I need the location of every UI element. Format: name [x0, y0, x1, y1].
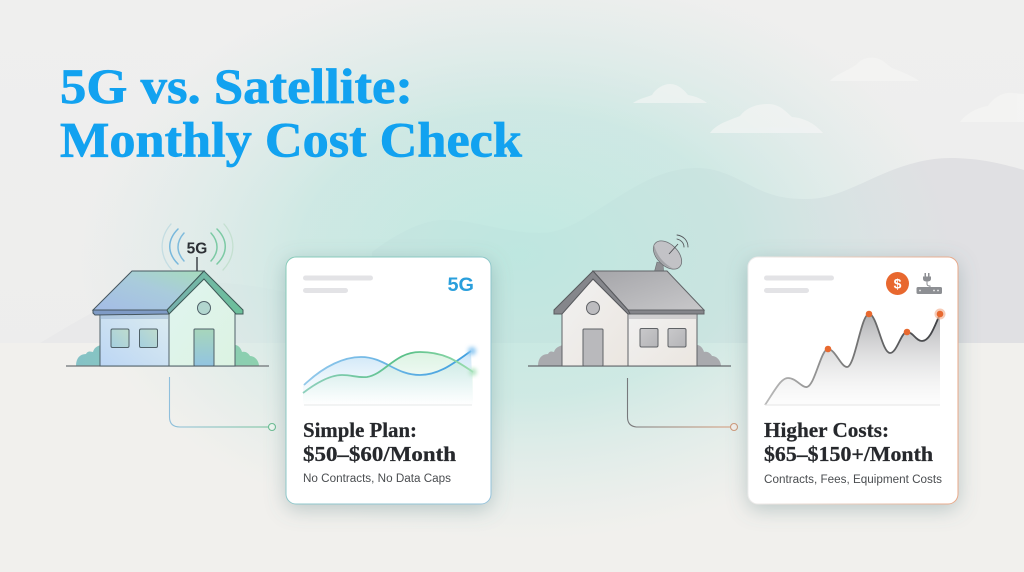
heading: simple plan: Simple Plan:	[303, 418, 417, 442]
icon: satellite dish	[648, 235, 688, 277]
icon: signal waves	[162, 224, 233, 270]
icon: satellite house	[528, 235, 731, 366]
text: satellite details: Contracts, Fees, Equipment Costs	[764, 474, 942, 486]
heading: simple plan: $50–$60/Month	[303, 442, 456, 466]
arrow: 5G connector	[170, 377, 276, 430]
title: 5G vs. Satellite:	[60, 58, 413, 114]
text: 5G details: No Contracts, No Data Caps	[303, 473, 451, 485]
chart: 5G flat cost lines	[303, 347, 476, 405]
icon: dollar badge	[886, 272, 909, 295]
heading: higher costs: Higher Costs:	[764, 418, 889, 442]
arrow: satellite connector	[628, 378, 738, 430]
icon: router with plug	[916, 273, 942, 294]
panel: 5G plan card	[286, 257, 491, 504]
icon: 5G house	[66, 224, 269, 366]
title	[60, 58, 522, 168]
clouds	[633, 58, 1024, 133]
title: Monthly Cost Check	[60, 112, 522, 168]
heading: simple plan	[303, 418, 456, 466]
heading: higher costs	[764, 418, 933, 466]
label: 5G: 5G	[448, 275, 474, 296]
heading: higher costs: $65–$150+/Month	[764, 442, 933, 466]
chart: rising cost line	[765, 308, 946, 405]
label: 5G antenna: 5G	[187, 240, 207, 258]
panel: satellite cost card	[748, 257, 958, 504]
icon: dollar badge: $	[894, 276, 902, 292]
